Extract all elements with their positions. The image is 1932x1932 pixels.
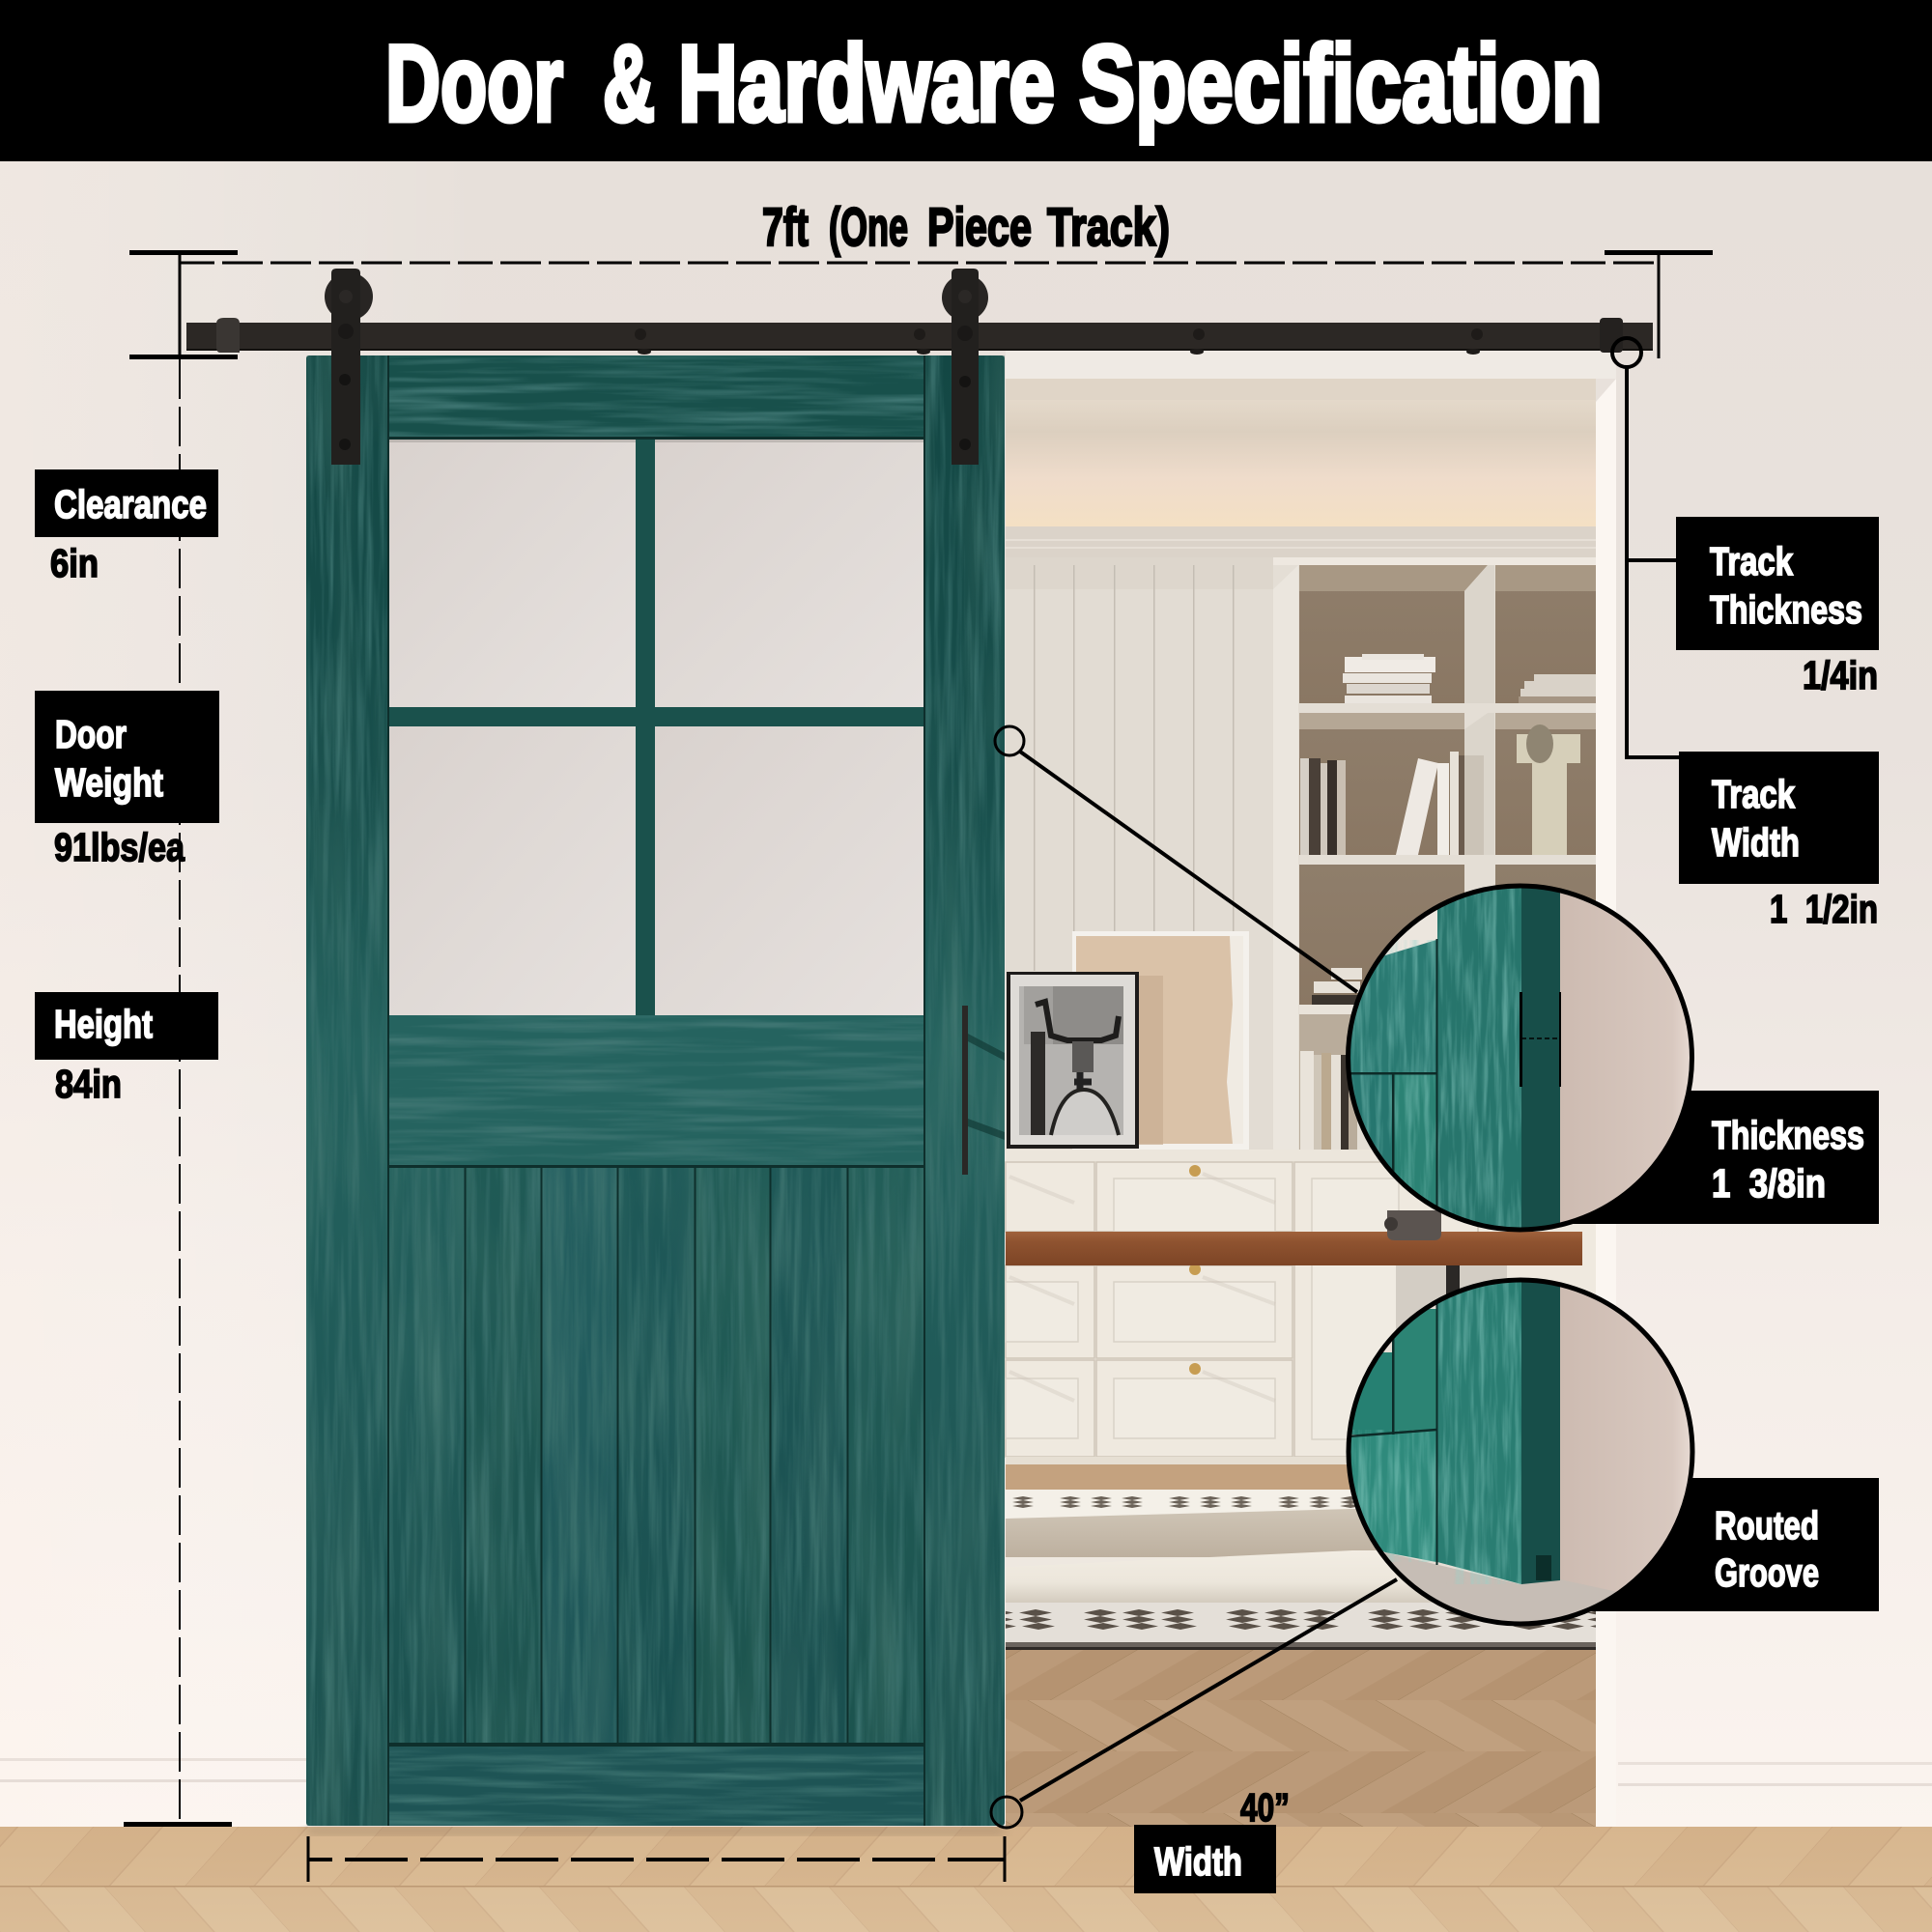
label text: routed groove — [1715, 1503, 1819, 1595]
door joints — [387, 355, 925, 1826]
label text: thickness: Thickness — [1712, 1113, 1864, 1157]
glass panes — [388, 438, 924, 1015]
label: height: Height — [54, 1002, 153, 1046]
planks — [388, 1166, 924, 1745]
track length label: (One — [829, 196, 908, 257]
door jamb — [1596, 379, 1616, 1826]
label: track width — [1679, 752, 1879, 931]
label text: routed groove: Groove — [1715, 1550, 1819, 1595]
title: Hardware — [678, 23, 1055, 144]
label text: thickness — [1712, 1113, 1864, 1206]
label: clearance — [35, 469, 218, 585]
label box: routed groove — [1546, 1478, 1879, 1611]
leader: track callouts — [1612, 338, 1679, 757]
detail circle: routed groove — [1343, 1275, 1700, 1633]
dimension: door width — [308, 1836, 1005, 1882]
title — [385, 23, 1603, 144]
label: door weight — [35, 691, 219, 869]
sliding track — [186, 318, 1653, 355]
framed pictures — [1007, 931, 1249, 1150]
title: Door — [385, 23, 563, 144]
bottom rail — [388, 1745, 924, 1826]
label: track thickness: Track — [1710, 539, 1793, 583]
detail circle: door thickness — [1343, 879, 1700, 1238]
room seen through the opening — [1006, 351, 1616, 1827]
wood grain — [306, 355, 1005, 1826]
rug and room floor — [1006, 1457, 1596, 1827]
leader: routed groove callout — [991, 1579, 1397, 1828]
leader: thickness callout — [995, 726, 1357, 992]
bookshelf — [1273, 565, 1596, 1154]
label: track thickness — [1676, 517, 1879, 697]
label text: routed groove: Routed — [1715, 1503, 1819, 1548]
header bar — [0, 0, 1932, 161]
label: width: Width — [1154, 1839, 1242, 1884]
label: track width: Track — [1712, 772, 1795, 816]
label: track thickness: 1/4in — [1803, 653, 1878, 697]
books and vase — [1300, 654, 1596, 1150]
label: clearance: Clearance — [54, 482, 207, 526]
cabinets — [1006, 1150, 1596, 1457]
door handle — [962, 1006, 1005, 1175]
label: track width: 1 1/2in — [1770, 887, 1878, 931]
label: height: 84in — [55, 1062, 122, 1106]
track stoppers — [216, 318, 1623, 353]
hanger strap right — [942, 269, 988, 465]
lock rail — [388, 1015, 924, 1166]
label text: thickness: 1 3/8in — [1712, 1161, 1826, 1206]
label: door weight: Weight — [55, 760, 163, 805]
label box: thickness — [1546, 1091, 1879, 1224]
label: track thickness: Thickness — [1710, 587, 1862, 632]
label: door weight: 91lbs/ea — [54, 825, 185, 869]
track length label: 7ft — [762, 196, 809, 257]
label: track width: Width — [1712, 820, 1800, 865]
label: clearance: 6in — [50, 541, 99, 585]
barn door — [306, 355, 1005, 1826]
label: width — [1134, 1785, 1290, 1893]
wall panelling — [1034, 565, 1235, 971]
label: height — [35, 992, 218, 1106]
table and mug — [1006, 1210, 1582, 1296]
track length label — [762, 196, 1170, 257]
muntins — [388, 438, 924, 1015]
track length label: Track) — [1047, 196, 1170, 257]
floor: herringbone wood — [0, 1826, 1932, 1932]
label: door weight: Door — [55, 712, 127, 756]
title: Specification — [1079, 23, 1603, 144]
title: & — [603, 23, 655, 144]
dimension: door height — [124, 359, 232, 1824]
hanger strap left — [325, 269, 373, 465]
label: width: 40” — [1240, 1785, 1290, 1830]
top rail — [388, 355, 924, 438]
dimension: track length — [129, 252, 1713, 358]
track length label: Piece — [927, 196, 1032, 257]
